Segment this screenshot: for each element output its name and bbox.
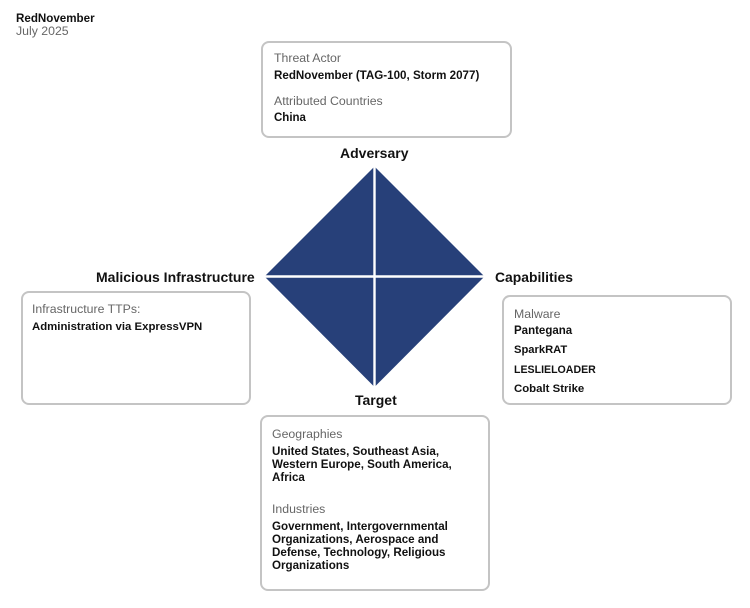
- title: RedNovember: [16, 12, 95, 25]
- panel: target: Organizations, Aerospace and: [272, 533, 438, 546]
- heading: malicious infrastructure: Malicious Infrastructure: [96, 269, 255, 285]
- heading: adversary: Adversary: [340, 145, 408, 161]
- heading: target: Target: [355, 392, 397, 408]
- panel: capabilities: Cobalt Strike: [514, 383, 584, 395]
- panel: infrastructure: Administration via ExpressVPN: [32, 321, 202, 333]
- title: [16, 12, 95, 38]
- title: July 2025: [16, 24, 69, 38]
- panel: adversary: [261, 41, 512, 138]
- panel: capabilities: Malware: [514, 307, 560, 321]
- panel: adversary: Attributed Countries: [274, 94, 383, 108]
- panel: target: Africa: [272, 471, 305, 484]
- panel: adversary: Threat Actor: [274, 51, 341, 65]
- panel: target: Organizations: [272, 559, 349, 572]
- panel: target: Government, Intergovernmental: [272, 520, 448, 533]
- panel: target: Industries: [272, 502, 325, 516]
- panel: capabilities: SparkRAT: [514, 344, 567, 356]
- panel: target: [260, 415, 490, 591]
- panel: capabilities: [502, 295, 732, 405]
- panel: target: Defense, Technology, Religious: [272, 546, 446, 559]
- panel: capabilities: LESLIELOADER: [514, 364, 596, 376]
- panel: infrastructure: [21, 291, 251, 405]
- panel: target: United States, Southeast Asia,: [272, 445, 439, 458]
- panel: capabilities: Pantegana: [514, 325, 572, 337]
- diamond model: [266, 168, 484, 386]
- heading: capabilities: Capabilities: [495, 269, 573, 285]
- panel: adversary: China: [274, 112, 306, 124]
- panel: target: Western Europe, South America,: [272, 458, 452, 471]
- panel: target: Geographies: [272, 427, 342, 441]
- panel: adversary: RedNovember (TAG-100, Storm 2077): [274, 69, 479, 82]
- panel: infrastructure: Infrastructure TTPs:: [32, 302, 140, 316]
